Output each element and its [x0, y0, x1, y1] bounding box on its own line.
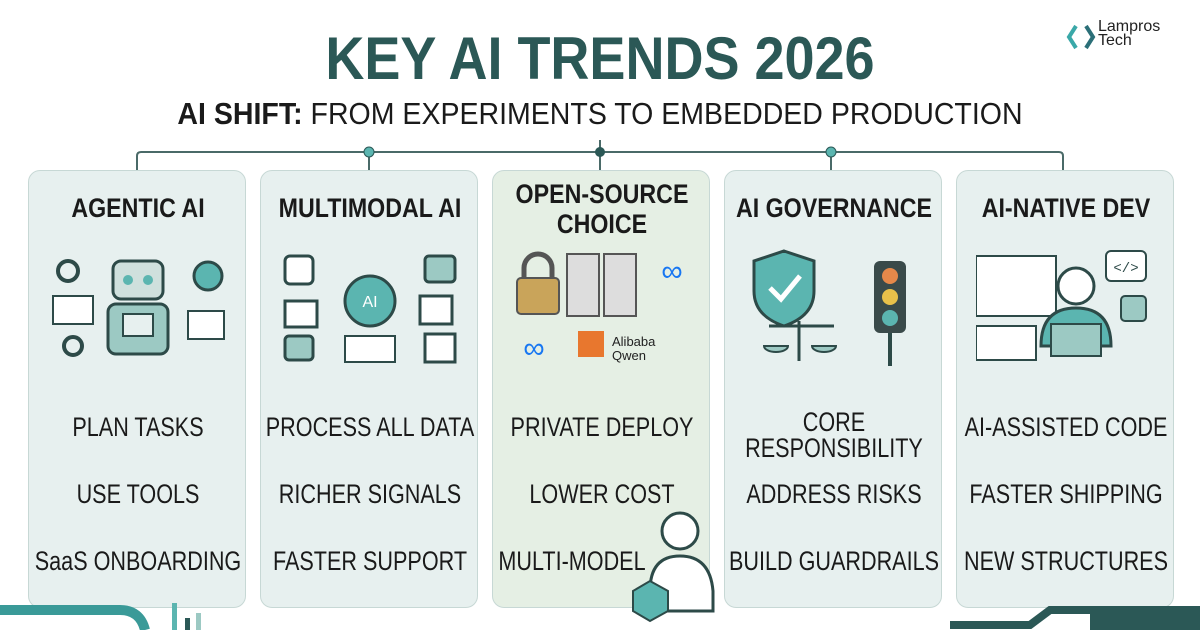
icon: developer with laptop: [976, 250, 1147, 361]
panel: ai-native dev: NEW STRUCTURES: [964, 546, 1168, 576]
panel: ai governance: AI GOVERNANCE: [736, 193, 932, 223]
icon: person with box: [632, 512, 714, 622]
panel: ai governance: ADDRESS RISKS: [746, 479, 922, 509]
panel: multimodal ai: [260, 170, 478, 608]
decoration: bottom left: [0, 603, 201, 630]
panel: agentic ai: PLAN TASKS: [72, 412, 204, 442]
icon: developer with laptop: </>: [1113, 261, 1139, 277]
panel: open-source choice: MULTI-MODEL: [498, 546, 646, 576]
panel: agentic ai: [28, 170, 246, 608]
panel: open-source choice: CHOICE: [557, 209, 647, 239]
panel: multimodal ai: PROCESS ALL DATA: [266, 412, 474, 442]
icon: lock and servers: ∞: [661, 255, 683, 288]
panel: ai governance: RESPONSIBILITY: [745, 433, 923, 463]
panel: multimodal ai: RICHER SIGNALS: [279, 479, 461, 509]
logo: Lampros: [1098, 18, 1160, 35]
panel: open-source choice: OPEN-SOURCE: [516, 179, 688, 209]
logo: Tech: [1098, 32, 1132, 49]
logo: [1066, 18, 1160, 50]
connector: [136, 140, 1064, 170]
icon: lock and servers: ∞: [523, 332, 545, 365]
subtitle: AI SHIFT: FROM EXPERIMENTS TO EMBEDDED PRODUCTION: [177, 96, 1023, 131]
icon: shield scale traffic light: [752, 249, 906, 366]
title: KEY AI TRENDS 2026: [325, 25, 875, 92]
panel: multimodal ai: FASTER SUPPORT: [273, 546, 467, 576]
panel: open-source choice: LOWER COST: [529, 479, 675, 509]
panel: agentic ai: AGENTIC AI: [71, 193, 205, 223]
panel: agentic ai: SaaS ONBOARDING: [35, 546, 241, 576]
icon: brain hub: AI: [362, 294, 378, 311]
panel: ai governance: CORE: [803, 407, 865, 437]
icon: lock and servers: Alibaba: [612, 334, 656, 349]
panel: ai governance: BUILD GUARDRAILS: [729, 546, 939, 576]
panel: agentic ai: USE TOOLS: [77, 479, 199, 509]
icon: lock and servers: Qwen: [612, 348, 646, 363]
panel: open-source choice: PRIVATE DEPLOY: [511, 412, 693, 442]
panel: open-source choice: [492, 170, 710, 608]
panel: ai-native dev: [956, 170, 1174, 608]
panel: ai-native dev: AI-ASSISTED CODE: [965, 412, 1167, 442]
decoration: bottom right: [950, 606, 1200, 630]
panel: multimodal ai: MULTIMODAL AI: [279, 193, 461, 223]
panel: ai-native dev: AI-NATIVE DEV: [982, 193, 1150, 223]
icon: lock and servers: [516, 252, 683, 365]
panel: ai-native dev: FASTER SHIPPING: [969, 479, 1163, 509]
panel: ai governance: [724, 170, 942, 608]
icon: brain hub: [284, 254, 456, 364]
icon: robot: [52, 259, 225, 357]
